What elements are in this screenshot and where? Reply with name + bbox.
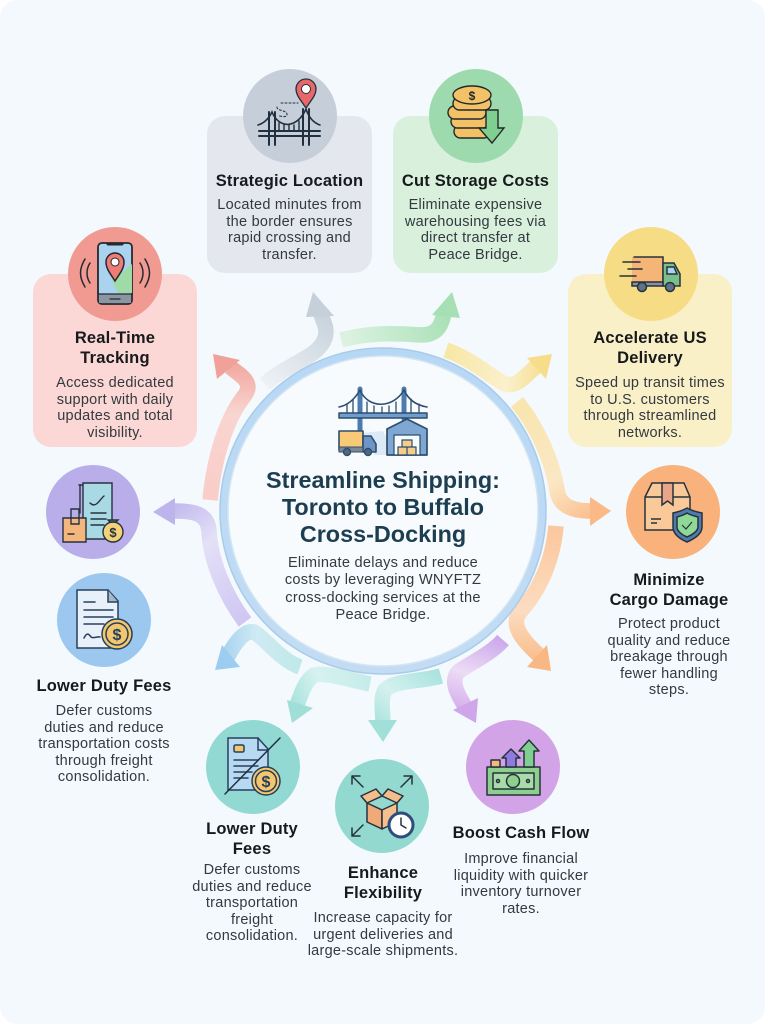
text: boost cash flow: Improve financial: [464, 851, 578, 867]
text: lower duty fees left: duties and reduce: [44, 720, 164, 736]
icon: customs document with box: [46, 465, 140, 559]
text: strategic location: Located minutes from: [217, 197, 362, 213]
text: enhance flexibility: Flexibility: [344, 884, 422, 902]
text: lower duty fees bottom: Lower Duty: [206, 820, 298, 838]
text: real-time tracking: support with daily: [57, 392, 173, 408]
text: real-time tracking: [56, 329, 174, 441]
panel: accelerate us delivery: [568, 274, 732, 447]
panel: strategic location: [207, 116, 372, 273]
panel: minimize cargo damage: [608, 465, 730, 698]
text: minimize cargo damage: Minimize: [633, 571, 705, 589]
icon: phone with map pin: [68, 227, 162, 321]
panel: enhance flexibility: [308, 759, 458, 959]
title: Streamline Shipping:: [266, 467, 500, 493]
text: cut storage costs: Peace Bridge.: [428, 247, 523, 263]
icon: bridge and pin: [243, 69, 337, 163]
icon: signed document with coin: [57, 573, 151, 667]
text: lower duty fees left: Lower Duty Fees: [36, 677, 172, 695]
text: real-time tracking: Access dedicated: [56, 375, 174, 391]
text: boost cash flow: rates.: [502, 901, 540, 917]
text: strategic location: transfer.: [262, 247, 317, 263]
icon: box with shield: [626, 465, 720, 559]
icon: crossed document with coin: $: [262, 774, 271, 791]
intro text: [285, 555, 481, 623]
text: lower duty fees bottom: [192, 820, 312, 944]
text: cut storage costs: direct transfer at: [421, 230, 530, 246]
text: minimize cargo damage: Protect product: [618, 616, 720, 632]
text: minimize cargo damage: steps.: [649, 682, 689, 698]
text: real-time tracking: visibility.: [87, 425, 143, 441]
text: cut storage costs: Eliminate expensive: [409, 197, 542, 213]
panel: cut storage costs: [393, 116, 558, 273]
text: strategic location: the border ensures: [226, 214, 353, 230]
text: lower duty fees left: [36, 677, 172, 785]
text: accelerate us delivery: [575, 329, 725, 441]
text: strategic location: rapid crossing and: [228, 230, 351, 246]
icon: customs document with box: $: [109, 525, 117, 540]
text: real-time tracking: updates and total: [57, 408, 173, 424]
intro text: Eliminate delays and reduce: [288, 555, 478, 571]
panel: lower duty fees left: [36, 573, 172, 785]
text: accelerate us delivery: Speed up transit times: [575, 375, 725, 391]
text: lower duty fees left: consolidation.: [58, 769, 150, 785]
text: lower duty fees bottom: transportation: [206, 895, 298, 911]
text: lower duty fees left: transportation costs: [38, 736, 170, 752]
icon: banknote with growth arrows: [466, 720, 560, 814]
text: accelerate us delivery: Delivery: [617, 349, 683, 367]
title: [266, 467, 500, 547]
panel: lower duty fees bottom: [192, 720, 312, 944]
text: accelerate us delivery: Accelerate US: [593, 329, 707, 347]
text: lower duty fees left: through freight: [55, 753, 153, 769]
text: strategic location: Strategic Location: [216, 172, 363, 190]
icon: box with expand arrows and clock: [335, 759, 429, 853]
title: Toronto to Buffalo: [282, 494, 484, 520]
text: lower duty fees bottom: duties and reduce: [192, 879, 312, 895]
text: boost cash flow: liquidity with quicker: [454, 868, 588, 884]
icon: signed document with coin: $: [113, 627, 122, 644]
text: lower duty fees bottom: freight: [231, 912, 273, 928]
text: real-time tracking: Real-Time: [75, 329, 155, 347]
text: boost cash flow: inventory turnover: [461, 884, 581, 900]
icon: hub bridge, truck and warehouse: [338, 386, 428, 456]
text: cut storage costs: [402, 172, 549, 263]
text: enhance flexibility: urgent deliveries and: [313, 927, 453, 943]
text: minimize cargo damage: fewer handling: [620, 666, 718, 682]
text: lower duty fees bottom: Fees: [233, 840, 271, 858]
text: enhance flexibility: Enhance: [348, 864, 418, 882]
panel: boost cash flow: [453, 720, 590, 917]
text: enhance flexibility: [308, 864, 458, 959]
text: lower duty fees bottom: consolidation.: [206, 928, 298, 944]
intro text: costs by leveraging WNYFTZ: [285, 572, 481, 588]
central hub ring: [219, 347, 547, 675]
text: accelerate us delivery: networks.: [618, 425, 682, 441]
text: cut storage costs: warehousing fees via: [405, 214, 546, 230]
text: strategic location: [216, 172, 363, 263]
text: real-time tracking: Tracking: [80, 349, 150, 367]
icon: coins and down arrow: [429, 69, 523, 163]
panel: real-time tracking: [33, 274, 197, 447]
icon: crossed document with coin: [206, 720, 300, 814]
text: lower duty fees bottom: Defer customs: [204, 862, 300, 878]
text: lower duty fees left: Defer customs: [56, 703, 152, 719]
text: minimize cargo damage: Cargo Damage: [610, 591, 728, 609]
text: boost cash flow: [453, 824, 590, 917]
title: Cross-Docking: [300, 521, 466, 547]
intro text: Peace Bridge.: [336, 607, 430, 623]
text: accelerate us delivery: to U.S. customers: [590, 392, 710, 408]
text: minimize cargo damage: breakage through: [610, 649, 728, 665]
text: enhance flexibility: Increase capacity for: [313, 910, 453, 926]
intro text: cross-docking services at the: [285, 590, 481, 606]
icon: coins and down arrow: $: [469, 89, 476, 103]
text: minimize cargo damage: quality and reduce: [608, 633, 730, 649]
text: boost cash flow: Boost Cash Flow: [453, 824, 589, 842]
text: cut storage costs: Cut Storage Costs: [402, 172, 549, 190]
text: enhance flexibility: large-scale shipments.: [308, 943, 458, 959]
text: accelerate us delivery: through streamlined: [584, 408, 716, 424]
icon: delivery truck: [604, 227, 698, 321]
text: minimize cargo damage: [608, 571, 730, 698]
